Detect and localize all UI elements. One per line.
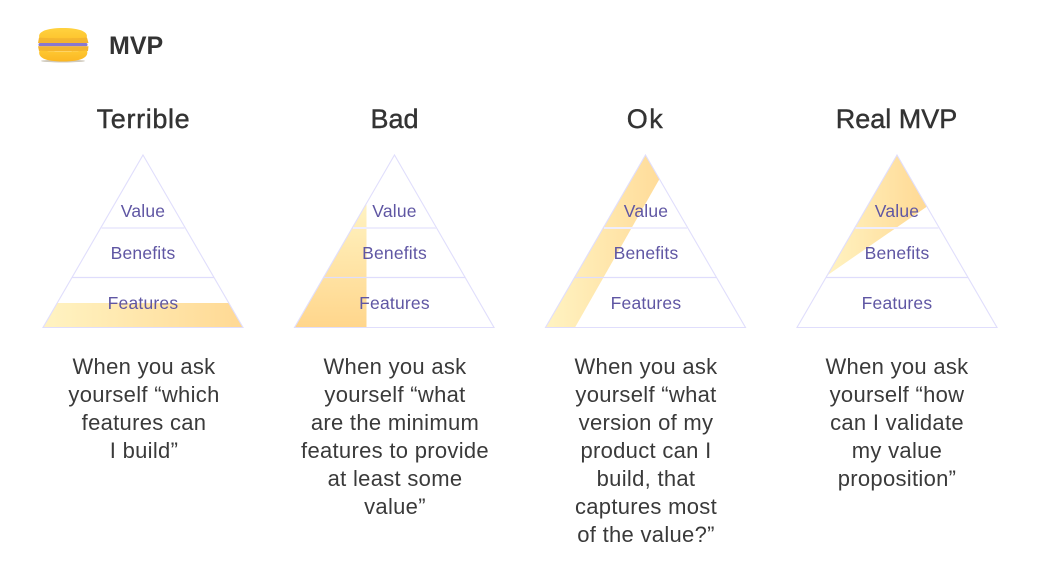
description: features to provide [301,438,489,463]
pyramid labels [359,201,430,313]
highlight: top slice [827,155,927,276]
highlight: features band [43,303,243,328]
description: my value [852,438,942,463]
pyramid labels [862,201,932,313]
description: yourself “what [324,382,466,407]
highlight: left slice [294,202,366,328]
description: yourself “what [575,382,717,407]
pyramid labels: Features [611,293,681,313]
description: yourself “which [68,382,220,407]
description: features can [82,410,206,435]
heading: Real MVP: Real MVP [836,104,957,134]
heading: Ok: Ok [627,104,664,134]
description: yourself “how [830,382,964,407]
description: proposition” [838,466,956,491]
pyramid labels [108,201,178,313]
description: When you ask [72,354,216,379]
pyramid outline [294,155,494,328]
panel: Terrible [43,104,243,463]
panel: Ok [546,104,746,547]
description: When you ask [574,354,718,379]
description: I build” [110,438,178,463]
pyramid labels: Value [875,201,919,221]
description [68,354,220,463]
description: can I validate [830,410,964,435]
description: value” [364,494,426,519]
pyramid labels: Benefits [362,243,427,263]
description: captures most [575,494,717,519]
description: at least some [328,466,462,491]
description: When you ask [323,354,467,379]
description: of the value?” [577,522,715,547]
heading: Terrible: Terrible [97,104,190,134]
pyramid labels: Benefits [111,243,175,263]
highlight: diagonal slice [546,155,660,328]
description: When you ask [825,354,969,379]
pyramid labels: Benefits [614,243,678,263]
panel: Real MVP [797,104,997,491]
description: are the minimum [311,410,479,435]
pyramid outline [546,155,746,328]
description: build, that [597,466,695,491]
description [825,354,969,491]
pyramid labels: Benefits [865,243,929,263]
heading: Bad: Bad [370,104,419,134]
pyramid labels: Value [372,201,417,221]
description: version of my [579,410,713,435]
panel: Bad [294,104,494,519]
icon: macaron [38,28,88,62]
pyramid outline [797,155,997,328]
description: product can I [580,438,712,463]
pyramid labels: Features [862,293,932,313]
description [574,354,718,547]
pyramid labels: Features [359,293,430,313]
pyramid labels: Value [624,201,668,221]
description [301,354,489,519]
pyramid outline [43,155,243,328]
pyramid labels: Value [121,201,165,221]
pyramid labels: Features [108,293,178,313]
title: MVP [109,32,163,60]
pyramid labels [611,201,681,313]
